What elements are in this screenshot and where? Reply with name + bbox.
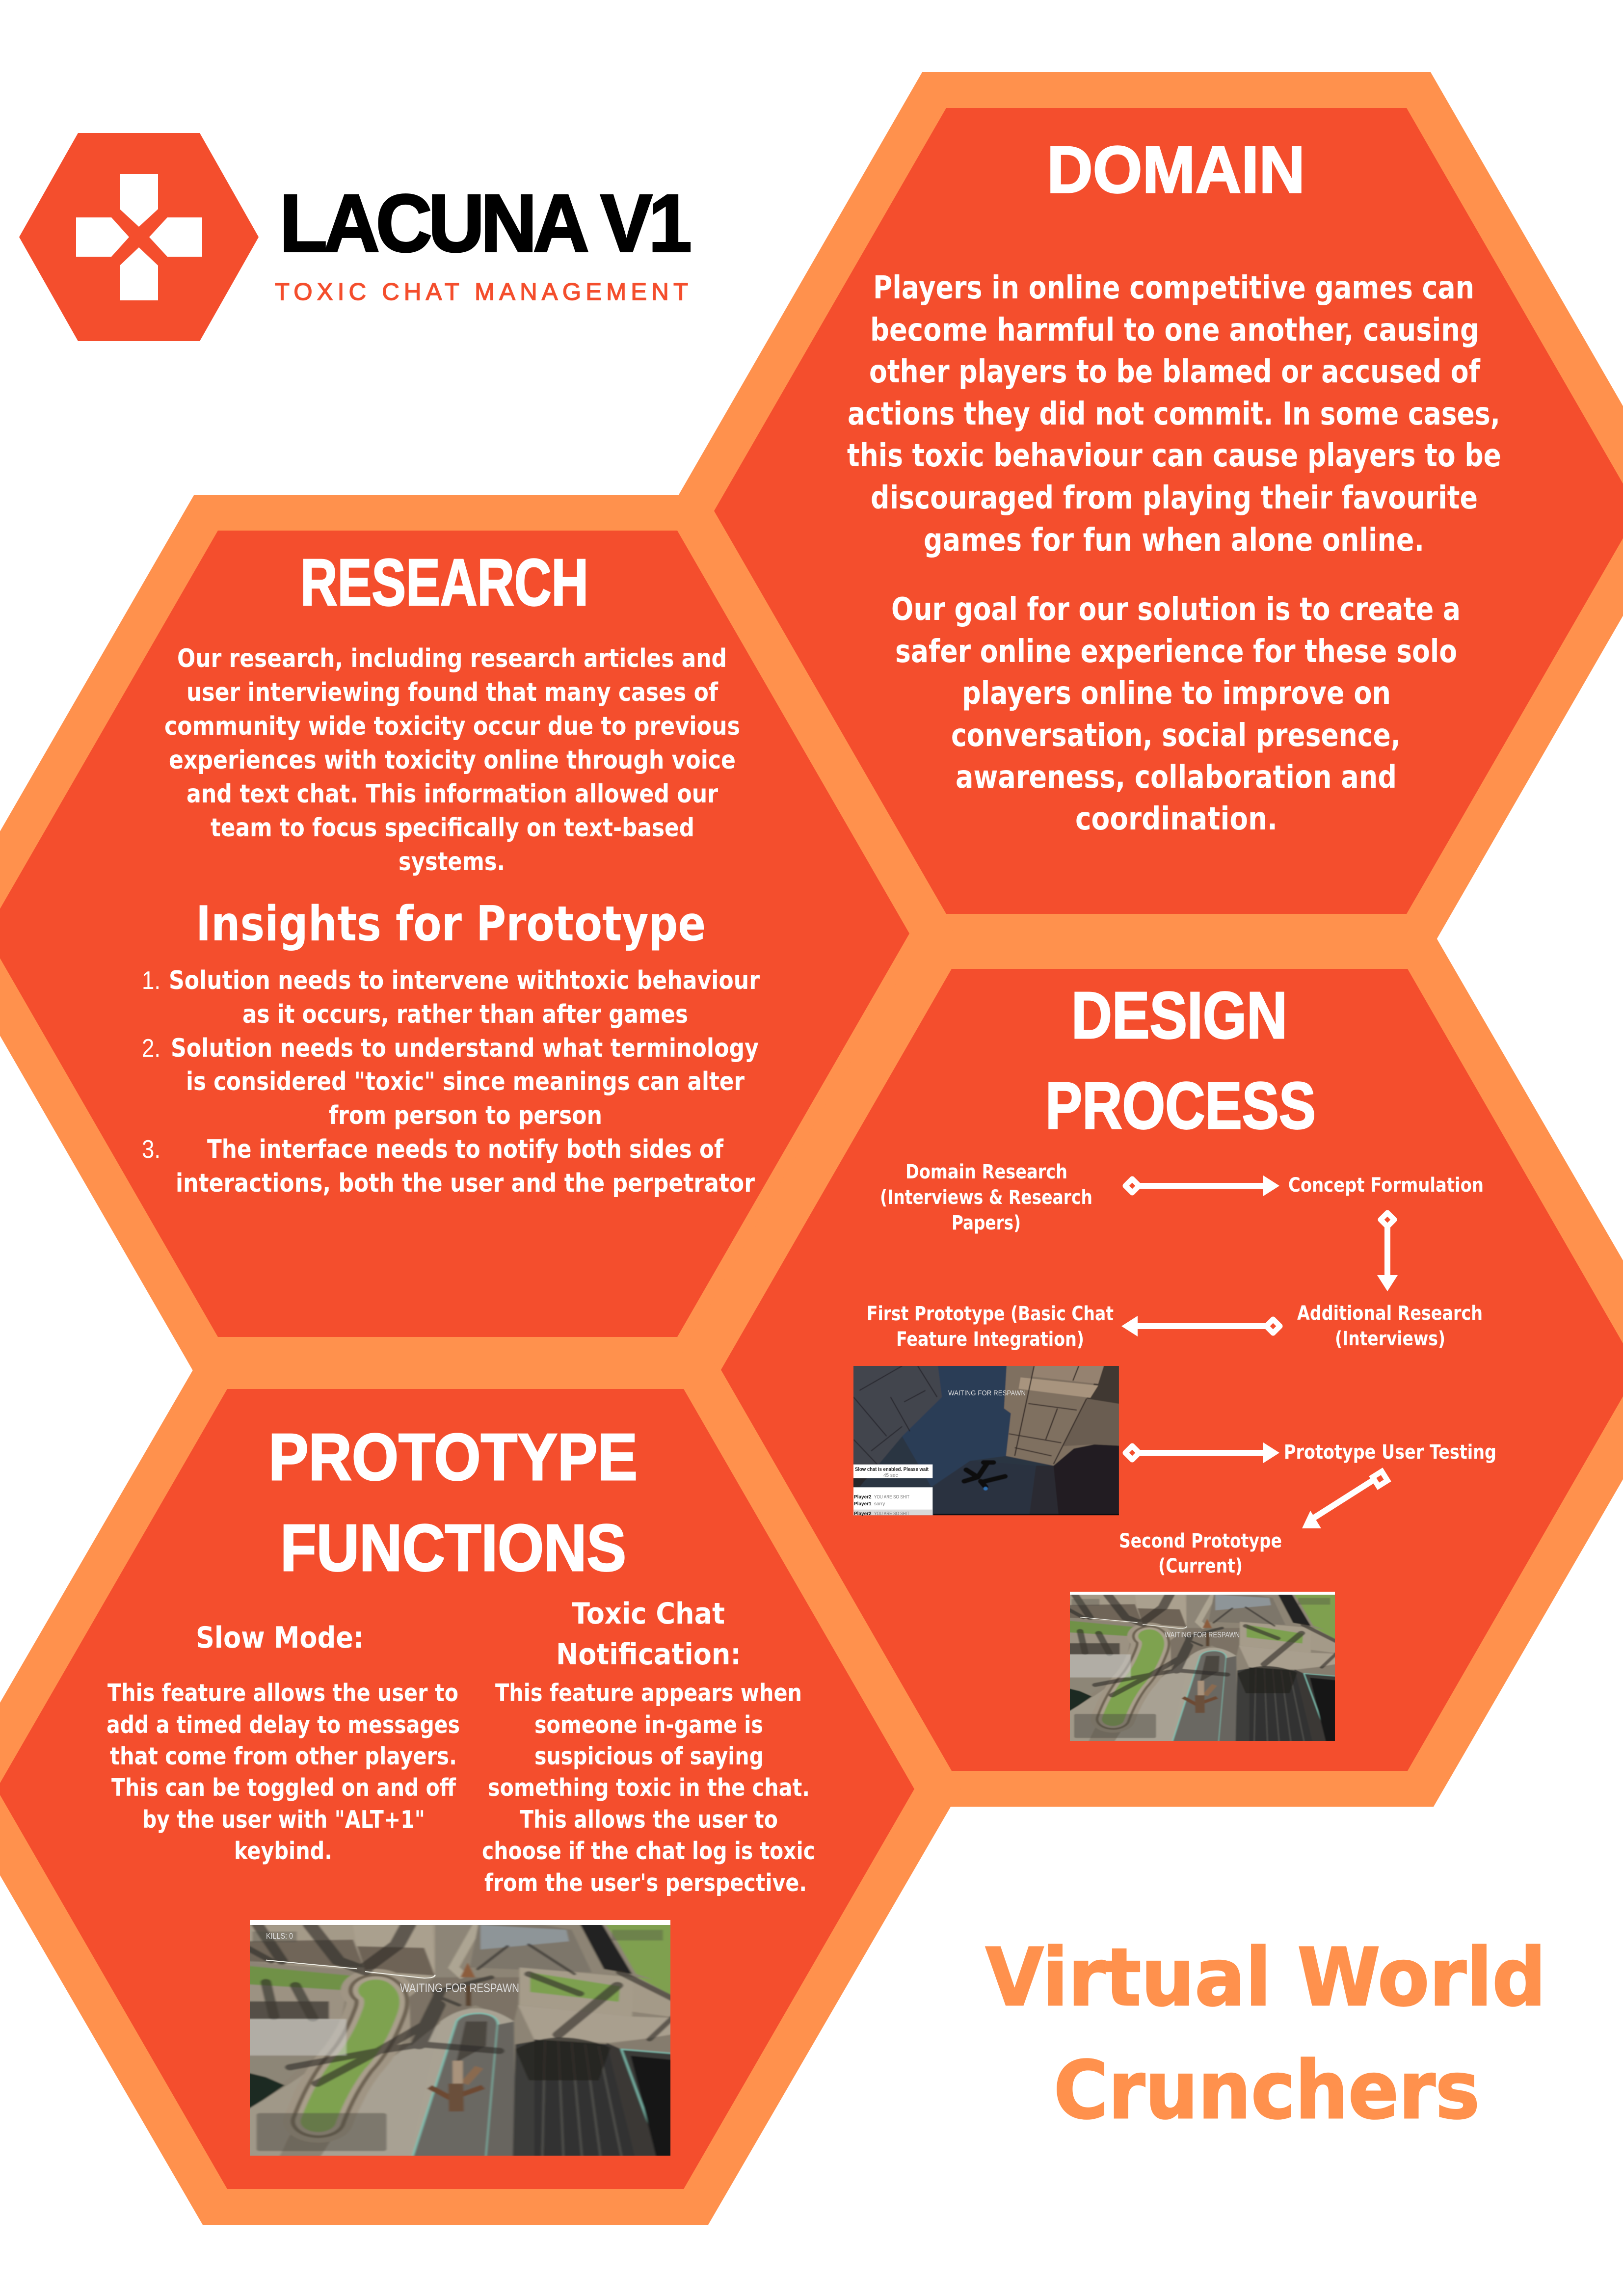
screenshot: second prototype: WAITING FOR RESPAWN — [1165, 1631, 1240, 1639]
heading: domain: DOMAIN — [1047, 133, 1305, 207]
text block: toxic chat notification description: choose if the chat log is toxic — [482, 1837, 815, 1865]
panel: design process — [721, 969, 1623, 1771]
screenshot: first prototype slow chat — [846, 1360, 1127, 1523]
screenshot: first prototype slow chat: Player2 — [854, 1495, 872, 1500]
text block: research summary: experiences with toxicity online through voice — [169, 746, 736, 775]
screenshot: first prototype slow chat: sorry — [874, 1501, 885, 1507]
screenshot: first prototype slow chat: WAITING FOR RESPAWN — [948, 1389, 1026, 1397]
arrow: user testing to second prototype — [1302, 1471, 1387, 1528]
screenshot: game with toxic chat notification: WAITING FOR RESPAWN — [400, 1981, 519, 1995]
text block: domain problem: Players in online competitive games can — [873, 270, 1474, 306]
label: second prototype — [1119, 1530, 1282, 1577]
label: first prototype: Feature Integration) — [896, 1328, 1084, 1351]
text block: research summary — [164, 644, 740, 877]
heading: insights for prototype: Insights for Prototype — [196, 896, 706, 952]
arrow: domain research to concept formulation — [1125, 1175, 1279, 1196]
label: second prototype: Second Prototype — [1119, 1530, 1282, 1552]
screenshot: second prototype — [1063, 1588, 1342, 1745]
label: additional research: (Interviews) — [1335, 1328, 1445, 1350]
label: first prototype — [867, 1303, 1114, 1351]
screenshot: first prototype slow chat: Player2 — [854, 1511, 872, 1517]
heading: prototype functions: PROTOTYPE — [268, 1420, 638, 1494]
screenshot: first prototype slow chat: Slow chat is enabled. Please wait — [855, 1467, 929, 1472]
screenshot: game with toxic chat notification — [239, 1914, 682, 2162]
label: domain research — [880, 1161, 1092, 1234]
text block: slow mode description: by the user with "ALT+1" — [142, 1806, 425, 1834]
panel: research — [0, 531, 909, 1337]
list: insights: is considered "toxic" since meanings can alter — [186, 1067, 745, 1096]
text block: research summary: Our research, including research articles and — [177, 644, 727, 673]
heading: design process: PROCESS — [1045, 1068, 1316, 1143]
logo tagline: TOXIC CHAT MANAGEMENT — [275, 279, 688, 305]
text block: domain goal: Our goal for our solution is to create a — [891, 591, 1461, 628]
screenshot: first prototype slow chat: YOU ARE SO SHIT — [874, 1495, 909, 1500]
text block: domain goal: awareness, collaboration and — [956, 759, 1397, 796]
label: domain research: Domain Research — [905, 1161, 1067, 1183]
text block: research summary: community wide toxicity occur due to previous — [164, 712, 740, 741]
text block: toxic chat notification description: This feature appears when — [495, 1679, 802, 1707]
text block: slow mode description — [106, 1679, 460, 1865]
list: insights — [142, 966, 760, 1198]
heading: design process — [1045, 978, 1316, 1143]
label: concept formulation: Concept Formulation — [1288, 1174, 1484, 1197]
list: insights: 2. — [142, 1034, 160, 1063]
logo — [19, 133, 690, 341]
heading: prototype functions — [268, 1420, 638, 1585]
text block: domain problem: this toxic behaviour can cause players to be — [847, 438, 1501, 474]
text block: research summary: team to focus specifically on text-based — [211, 813, 694, 843]
text block: domain problem: games for fun when alone online. — [924, 522, 1424, 559]
heading: research: RESEARCH — [300, 545, 588, 619]
label: domain research: (Interviews & Research — [880, 1186, 1092, 1209]
team name: Crunchers — [1054, 2045, 1480, 2137]
heading: prototype functions: FUNCTIONS — [280, 1511, 626, 1585]
screenshot: game with toxic chat notification: KILLS: 0 — [266, 1931, 293, 1941]
text block: domain goal: coordination. — [1075, 801, 1277, 837]
arrow: additional research to first prototype — [1121, 1316, 1280, 1336]
list: insights: Solution needs to intervene withtoxic behaviour — [169, 966, 760, 995]
list: insights: The interface needs to notify both sides of — [207, 1135, 724, 1164]
text block: slow mode description: This can be toggled on and off — [111, 1774, 456, 1802]
text block: toxic chat notification description: This allows the user to — [520, 1806, 778, 1834]
subheading: toxic chat notification: Notification: — [556, 1637, 741, 1672]
text block: domain problem — [847, 270, 1501, 559]
subheading: toxic chat notification: Toxic Chat — [572, 1597, 725, 1631]
list: insights: interactions, both the user and the perpetrator — [176, 1169, 755, 1198]
text block: domain problem: actions they did not commit. In some cases, — [848, 396, 1500, 432]
team name — [985, 1932, 1546, 2137]
text block: slow mode description: that come from other players. — [110, 1742, 457, 1770]
text block: slow mode description: add a timed delay to messages — [106, 1711, 460, 1739]
arrow: concept formulation to additional research — [1377, 1213, 1398, 1291]
screenshot: first prototype slow chat: YOU ARE SO SHIT — [874, 1511, 909, 1517]
text block: domain goal: players online to improve on — [962, 675, 1391, 712]
list: insights: 3. — [142, 1135, 160, 1164]
text block: domain goal — [891, 591, 1461, 837]
screenshot: first prototype slow chat: Player1 — [854, 1501, 872, 1507]
screenshot: first prototype slow chat: 45 sec — [883, 1473, 898, 1478]
team name: Virtual World — [985, 1932, 1546, 2024]
text block: slow mode description: This feature allows the user to — [107, 1679, 458, 1707]
panel: prototype functions — [0, 1389, 914, 2189]
text block: domain problem: become harmful to one another, causing — [870, 312, 1479, 348]
text block: toxic chat notification description: someone in-game is — [534, 1711, 763, 1739]
text block: toxic chat notification description: something toxic in the chat. — [488, 1774, 810, 1802]
list: insights: Solution needs to understand what terminology — [171, 1034, 759, 1063]
panel: domain — [714, 108, 1623, 914]
label: first prototype: First Prototype (Basic Chat — [867, 1303, 1114, 1325]
logo wordmark: LACUNA V1 — [280, 178, 690, 269]
text block: domain problem: other players to be blamed or accused of — [869, 354, 1481, 390]
text block: research summary: systems. — [399, 847, 505, 877]
heading: design process: DESIGN — [1071, 978, 1287, 1052]
subheading: slow mode: Slow Mode: — [196, 1621, 364, 1655]
label: domain research: Papers) — [952, 1212, 1021, 1234]
text block: research summary: and text chat. This information allowed our — [186, 779, 718, 809]
label: additional research — [1297, 1302, 1483, 1350]
text block: toxic chat notification description — [482, 1679, 815, 1897]
list: insights: as it occurs, rather than after games — [242, 1000, 688, 1029]
label: prototype user testing: Prototype User Testing — [1284, 1441, 1496, 1464]
text block: slow mode description: keybind. — [234, 1837, 332, 1865]
text block: domain problem: discouraged from playing their favourite — [871, 480, 1478, 516]
label: additional research: Additional Research — [1297, 1302, 1483, 1325]
list: insights: 1. — [142, 966, 160, 995]
text block: domain goal: conversation, social presence, — [951, 718, 1401, 754]
list: insights: from person to person — [329, 1101, 602, 1130]
text block: research summary: user interviewing found that many cases of — [186, 678, 718, 707]
text block: toxic chat notification description: suspicious of saying — [534, 1742, 764, 1770]
icon: game controller d-pad hexagon — [19, 133, 259, 341]
label: second prototype: (Current) — [1158, 1555, 1243, 1577]
subheading: toxic chat notification — [556, 1597, 741, 1672]
text block: toxic chat notification description: from the user's perspective. — [484, 1869, 807, 1897]
text block: domain goal: safer online experience for these solo — [895, 634, 1457, 670]
arrow: first prototype to user testing — [1125, 1442, 1279, 1463]
